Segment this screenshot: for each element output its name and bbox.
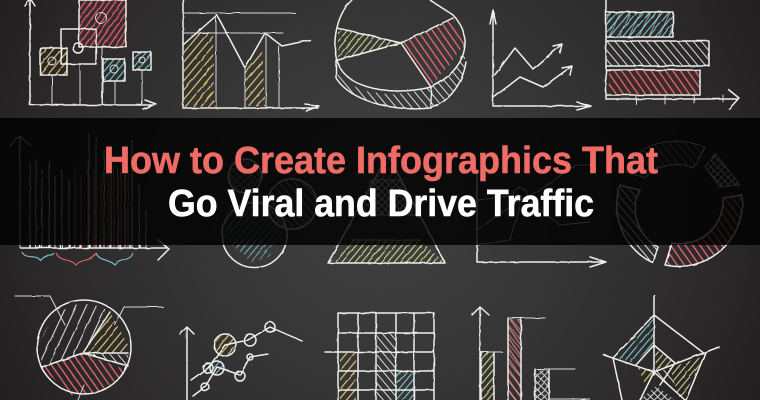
chart: grid table [325, 313, 434, 400]
chart: 3D pie [335, 0, 466, 109]
chart: venn circles [222, 159, 317, 268]
dark title band [0, 118, 760, 245]
chart: horizontal bars [606, 0, 739, 109]
chart: radar [604, 295, 719, 400]
chart: pie with callouts [15, 296, 163, 400]
chart: segmented donut [617, 141, 742, 266]
chart: spike bars with braces [10, 133, 169, 265]
chart: bubble scatter [180, 322, 302, 400]
title line 1: How to Create Infographics That [104, 140, 658, 182]
chart: vertical bars [472, 307, 590, 400]
title line 2: Go Viral and Drive Traffic [168, 183, 594, 225]
chart: area line chart [183, 0, 319, 111]
chart: faded line chart [477, 165, 606, 267]
title [104, 140, 658, 225]
chart: pyramid triangle [328, 155, 445, 263]
chart: boxes scatter plot [25, 0, 156, 109]
chart: two line arrows [490, 10, 591, 110]
